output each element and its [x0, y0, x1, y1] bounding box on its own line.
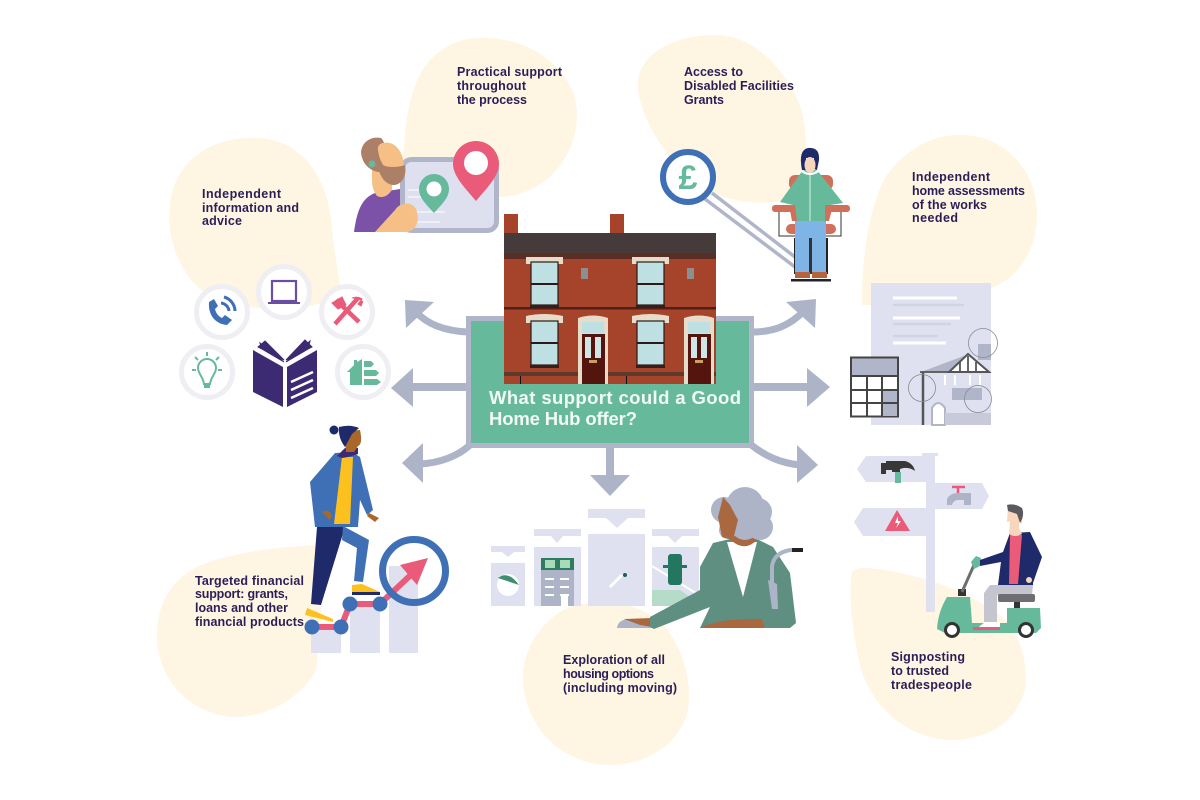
icon: phone — [196, 286, 248, 338]
icon: pound magnifier: £ — [679, 159, 698, 197]
panel: targeted financial support blob — [157, 545, 321, 717]
arrow: lower left — [402, 443, 470, 483]
panel: housing options blob — [523, 602, 689, 765]
icon: laptop — [258, 266, 310, 318]
sign: hammer — [857, 456, 926, 483]
panel: disabled facilities grants blob — [638, 35, 806, 203]
text: practical support: throughout — [457, 79, 527, 93]
card: stairlift — [652, 529, 699, 606]
panel: practical support blob — [403, 38, 577, 197]
panel: signposting blob — [850, 568, 1026, 740]
central heading: What support could a Good — [489, 387, 741, 408]
icon: green map pin — [419, 174, 449, 213]
central heading: Home Hub offer? — [489, 408, 637, 429]
icon group: advice icons and book — [182, 266, 388, 407]
text: housing options: housing options — [563, 667, 654, 681]
card: pie — [491, 546, 525, 606]
illustration: signpost and man on mobility scooter — [854, 453, 1042, 636]
text: practical support: Practical support — [457, 65, 563, 79]
sign: tap — [930, 483, 989, 509]
text: targeted financial support: Targeted financial — [195, 574, 304, 588]
text: signposting: tradespeople — [891, 678, 972, 692]
icon: calculator — [851, 358, 898, 416]
text: disabled facilities grants: Access to — [684, 65, 743, 79]
text: signposting: Signposting — [891, 650, 965, 664]
text: housing options: (including moving) — [563, 681, 677, 695]
illustration: person climbing financial chart — [304, 426, 446, 653]
scooter — [937, 597, 1041, 633]
text: home assessments: Independent — [912, 170, 991, 184]
icon: open book — [253, 340, 317, 407]
text: targeted financial support: support: grants, — [195, 587, 288, 601]
text: signposting: to trusted — [891, 664, 949, 678]
icon: tools — [322, 286, 372, 338]
sign: warning — [854, 508, 926, 536]
illustration: grant magnifier and woman in chair — [663, 148, 850, 282]
card: key — [588, 509, 645, 606]
text: disabled facilities grants: Disabled Facilities — [684, 79, 794, 93]
illustration: housing options cards and woman in wheelchair — [491, 487, 803, 629]
text: independent information and advice: information and — [202, 201, 299, 215]
text: home assessments: of the works — [912, 198, 987, 212]
text: housing options: Exploration of all — [563, 653, 665, 667]
illustration: man with tablet and map pins — [354, 138, 499, 232]
illustration: home assessment — [851, 283, 998, 425]
text: independent information and advice: advice — [202, 214, 242, 228]
arrow: down — [590, 446, 630, 496]
panel: independent information blob — [169, 138, 341, 309]
text: targeted financial support: financial products — [195, 615, 304, 629]
icon: red map pin — [453, 141, 499, 201]
arrow: lower right — [750, 444, 818, 483]
central panel — [468, 318, 752, 446]
arrow: upper left — [405, 300, 468, 332]
text: home assessments: needed — [912, 211, 958, 225]
arrow: left — [391, 368, 468, 407]
card: flats — [534, 529, 581, 606]
text: disabled facilities grants: Grants — [684, 93, 724, 107]
text: practical support: the process — [457, 93, 527, 107]
man — [984, 585, 1033, 622]
text: home assessments: home assessments — [912, 184, 1025, 198]
arrow: upper right — [752, 299, 816, 332]
arrow: right — [752, 368, 830, 407]
icon: magnifying glass — [382, 540, 446, 602]
text: targeted financial support: loans and other — [195, 601, 288, 615]
icon: home energy rating — [338, 346, 388, 398]
icon: pound magnifier — [663, 152, 713, 202]
illustration: terraced house — [504, 214, 716, 384]
text: independent information and advice: Independent — [202, 187, 282, 201]
panel: home assessments blob — [862, 135, 1037, 305]
icon: light bulb — [182, 346, 232, 398]
